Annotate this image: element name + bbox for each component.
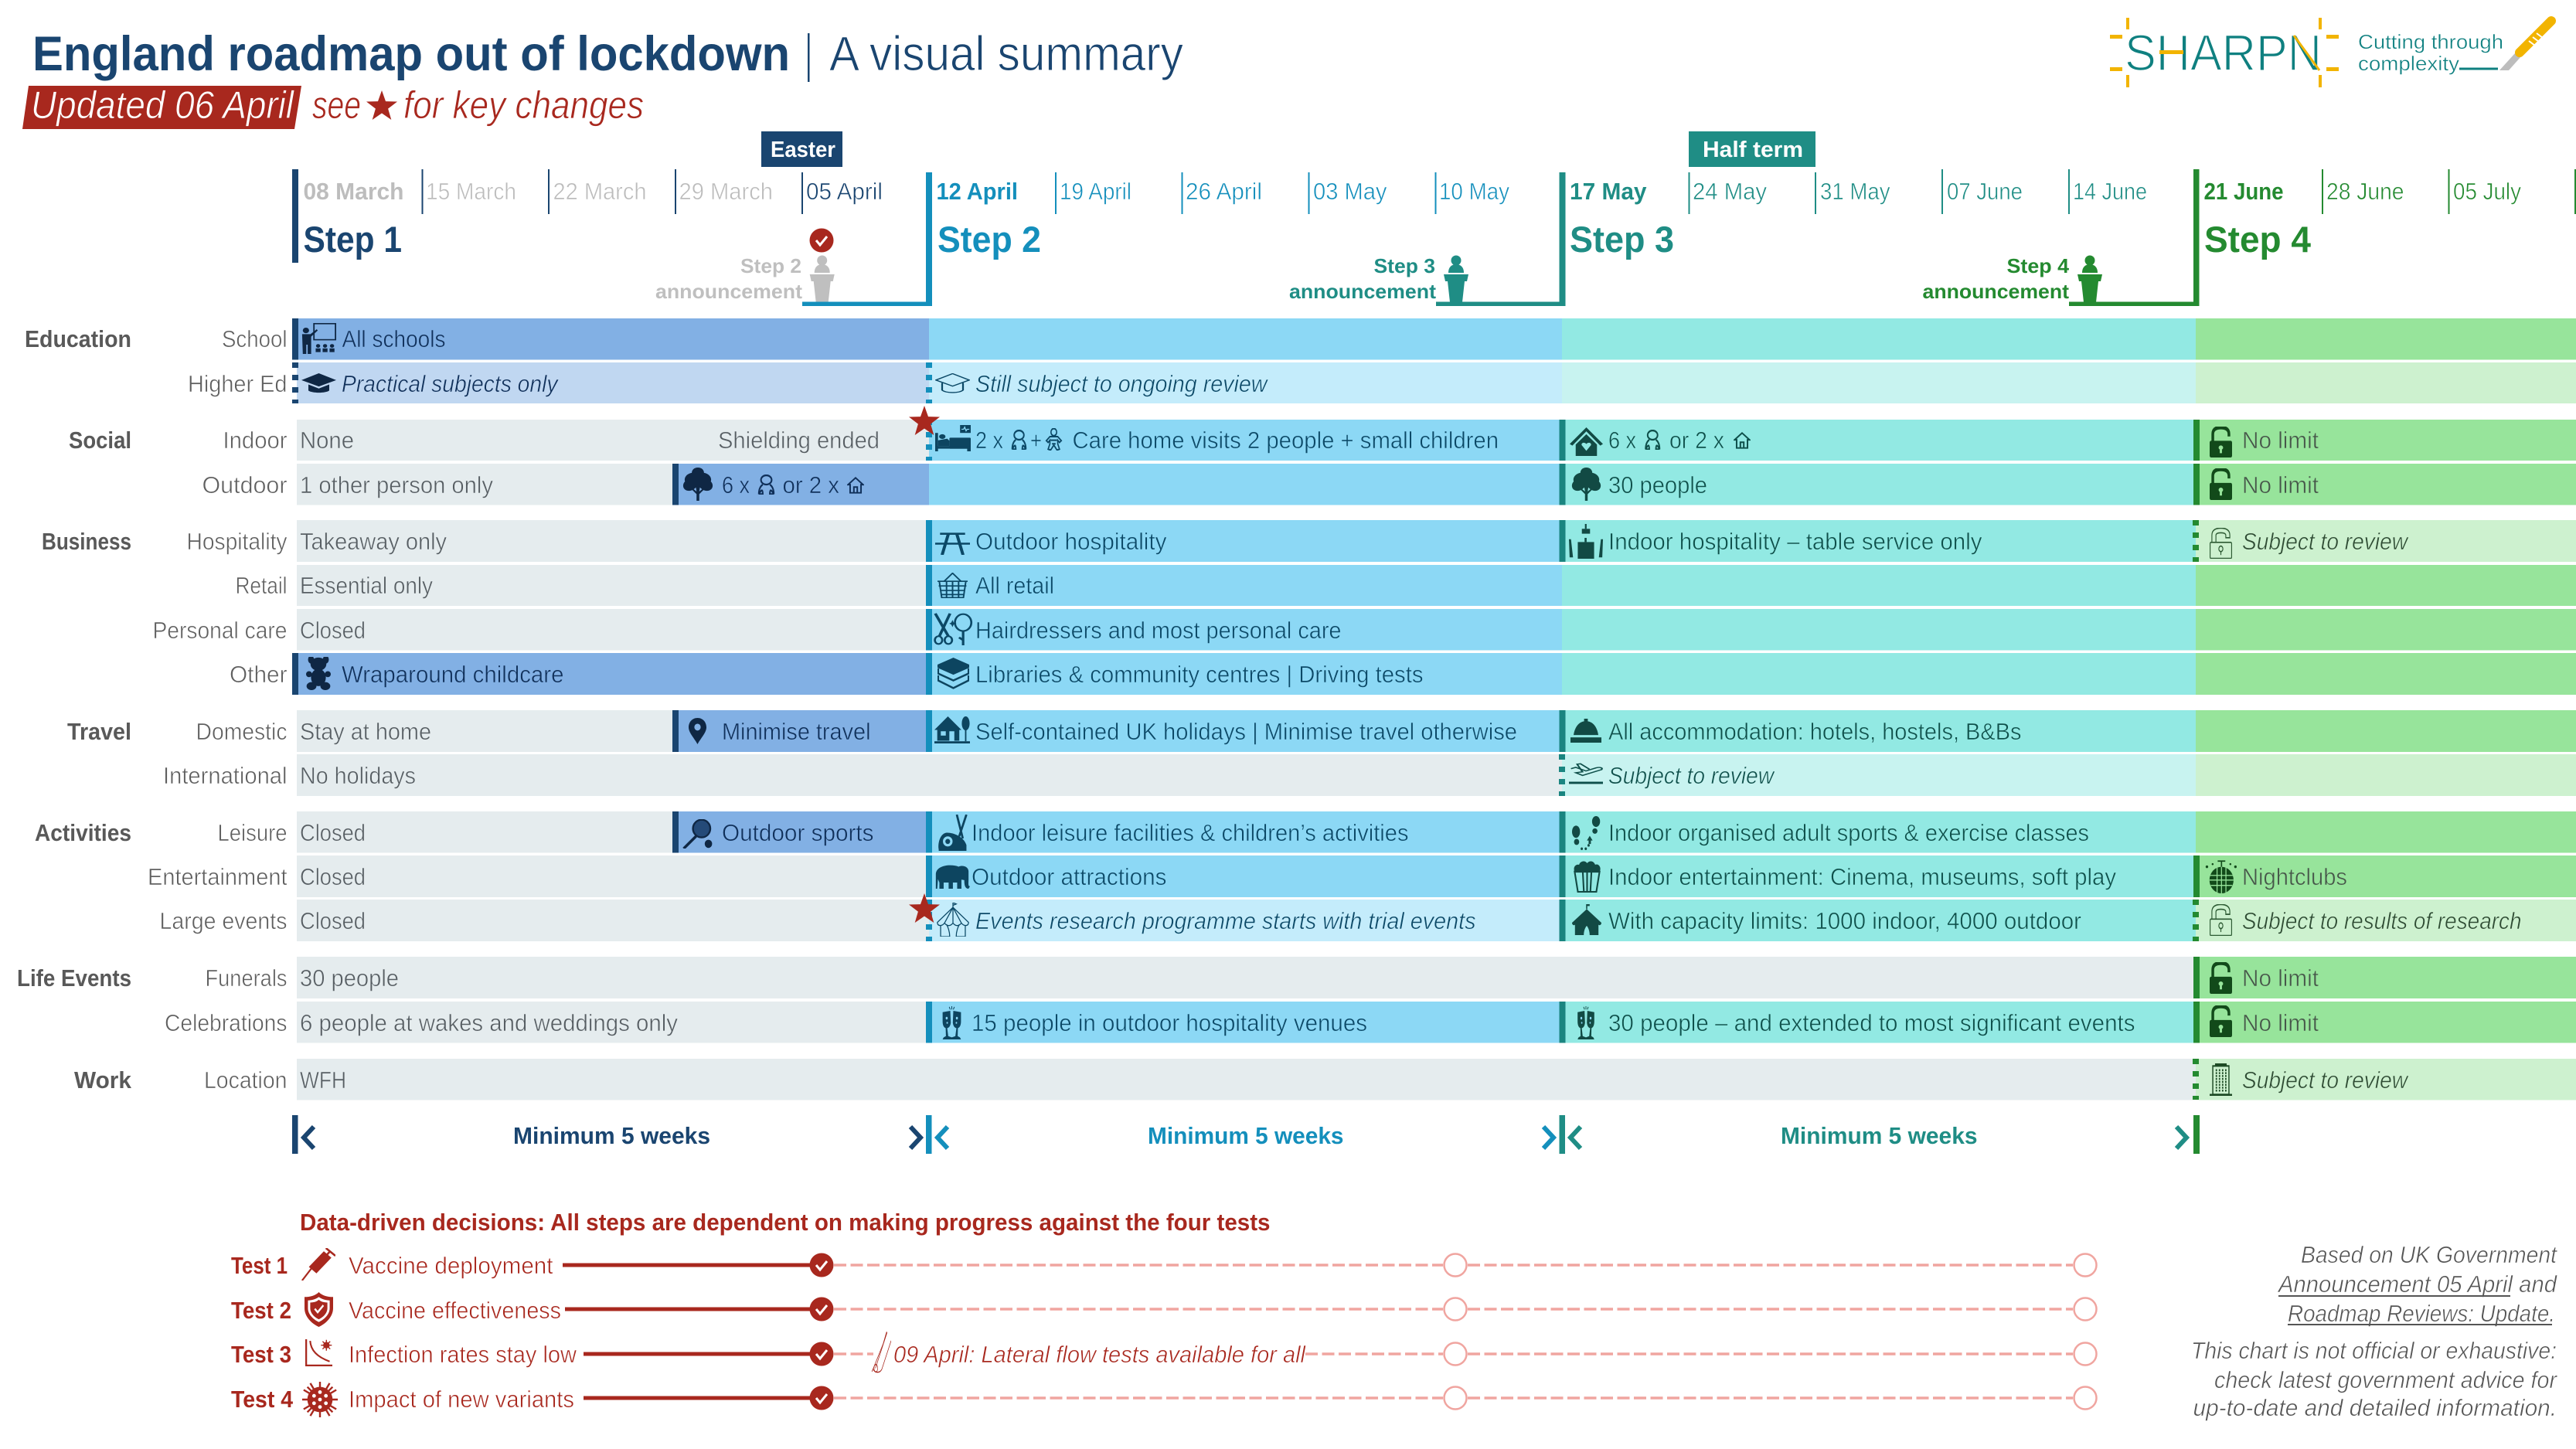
row: Business / Retail (297, 565, 2576, 606)
row labels: International (163, 762, 288, 789)
step 3 announcement (1289, 254, 1468, 303)
text: or 2 x: or 2 x (782, 471, 839, 498)
text: Subject to review: Subject to review (2242, 1066, 2409, 1094)
timeline: step 2: 26 April (1186, 178, 1262, 205)
timeline: step 1: 15 March (426, 178, 516, 205)
test 1: vaccine deployment: Vaccine deployment (349, 1252, 553, 1279)
icon: champagne flutes (1577, 1006, 1594, 1039)
text: Practical subjects only: Practical subjects only (342, 370, 560, 397)
text: Self-contained UK holidays: Self-contained UK holidays | Minimise travel otherwise (975, 718, 1517, 745)
row labels: Other (230, 661, 288, 688)
logo: SHARPN: SHARPN (2125, 24, 2322, 81)
timeline: step 4 (2069, 169, 2576, 306)
row labels: Leisure (218, 819, 288, 846)
category labels (17, 325, 132, 1094)
step 4 announcement (1923, 254, 2102, 303)
test 3: infection rates: Infection rates stay low (349, 1341, 577, 1368)
icon: tree (683, 468, 713, 501)
row labels: Entertainment (148, 863, 288, 890)
source note: Based on UK Government (2301, 1241, 2557, 1268)
text: Outdoor hospitality: Outdoor hospitality (975, 528, 1167, 555)
text: 15 people: 15 people in outdoor hospitality venues (972, 1009, 1367, 1036)
heading: data-driven decisions: Data-driven decisions: All steps are dependent on making progress against the four tests (300, 1209, 1271, 1236)
text: None: None (300, 427, 354, 454)
text: Stay at home: Stay at home (300, 718, 431, 745)
icon: virus (301, 1382, 339, 1417)
test 1: vaccine deployment: Test 1 (231, 1252, 288, 1279)
text: Closed: Closed (300, 819, 366, 846)
timeline: step 1: 29 March (679, 178, 773, 205)
category labels: Life Events (17, 964, 131, 992)
timeline: step 2: 12 April (937, 178, 1018, 205)
text: With capacity limits: With capacity limits: 1000 indoor, 4000 outdoor (1608, 907, 2081, 934)
logo: SHARPN (2110, 18, 2551, 87)
test 4: new variants: Impact of new variants (349, 1386, 574, 1413)
category labels: Travel (67, 718, 131, 745)
text: Closed: Closed (300, 863, 366, 890)
row labels: Higher Ed (188, 370, 288, 397)
logo: SHARPN: complexity (2358, 52, 2459, 75)
row labels: Domestic (196, 718, 288, 745)
text: All schools: All schools (342, 325, 445, 352)
text: Still subject to ongoing review: Still subject to ongoing review (975, 370, 1269, 397)
update banner: Updated 06 April (31, 83, 295, 127)
icon: holiday cottage (934, 716, 970, 743)
star: Shielding change (909, 406, 940, 435)
text: Wraparound childcare: Wraparound childcare (342, 661, 564, 688)
test 3: infection rates: Test 3 (231, 1341, 291, 1368)
text: Minimise travel: Minimise travel (722, 718, 870, 745)
row labels: Celebrations (165, 1009, 288, 1036)
arrow: step 3 minimum duration (1560, 1115, 2186, 1154)
row: Activities / Leisure (297, 811, 2576, 853)
timeline: step 4: 21 June (2204, 178, 2283, 205)
row: Business / Other (292, 653, 2576, 695)
icon: person (1012, 430, 1026, 449)
text: No limit: No limit (2242, 427, 2319, 454)
row labels: Location (204, 1066, 288, 1094)
text: plus: + (1030, 427, 1042, 454)
row labels: Retail (235, 572, 288, 599)
icon: open lock (2210, 469, 2232, 500)
icon: baby (1045, 428, 1062, 451)
timeline: step 1: Step 1 (303, 219, 402, 260)
text: Indoor entertainment: Indoor entertainment: Cinema, museums, soft play (1608, 863, 2116, 890)
timeline: step 3: 07 June (1947, 178, 2023, 205)
arrow: step 1 minimum duration (292, 1115, 920, 1154)
row: Life Events / Celebrations (297, 1002, 2576, 1043)
arrow: step 2 minimum duration (926, 1115, 1553, 1154)
row labels: Hospitality (187, 528, 288, 555)
text: Subject to review: Subject to review (1608, 762, 1775, 789)
icon: elephant (935, 866, 970, 889)
text: Indoor organised adult sports: Indoor organised adult sports & exercise classes (1608, 819, 2089, 846)
icon: syringe (301, 1248, 335, 1281)
title (32, 27, 1183, 82)
row: Business / Hospitality (297, 520, 2576, 562)
timeline: step 2: 10 May (1439, 178, 1509, 205)
test 1: vaccine deployment (231, 1248, 2096, 1281)
step 3 announcement: announcement (1289, 280, 1436, 303)
row: Life Events / Funerals (297, 957, 2576, 998)
row labels: Personal care (153, 617, 288, 644)
timeline: step 3: 14 June (2073, 178, 2147, 205)
key changes note: see (312, 83, 361, 127)
icon: cross trainer (938, 815, 968, 851)
text: No limit: No limit (2242, 964, 2319, 992)
text: 1 other person only: 1 other person only (300, 471, 493, 498)
text: Essential only: Essential only (300, 572, 433, 599)
icon: hotel bell (1570, 719, 1601, 743)
text: 6 people at wakes: 6 people at wakes and weddings only (300, 1009, 678, 1036)
icon: books (938, 658, 969, 689)
timeline: step 1 (292, 169, 883, 263)
disclaimer note (2191, 1337, 2558, 1421)
row labels: Funerals (206, 964, 288, 992)
text: No limit: No limit (2242, 471, 2319, 498)
step 2 announcement (done): announcement (655, 280, 802, 303)
category labels: Education (25, 325, 131, 352)
icon: person (759, 475, 774, 494)
icon: circus tent (1572, 904, 1601, 935)
timeline: step 3: Step 3 (1570, 219, 1674, 260)
text: or 2 x: or 2 x (1669, 427, 1724, 454)
icon: test tube (872, 1332, 891, 1372)
icon: graduation cap (301, 373, 336, 393)
disclaimer note: check latest government advice for (2214, 1366, 2558, 1393)
text: Closed: Closed (300, 617, 366, 644)
arrow end: step 4 tick (2193, 1115, 2200, 1154)
step 2 announcement (done): Step 2 (740, 254, 801, 277)
timeline: step 2: Step 2 (938, 219, 1041, 260)
step 4 announcement: announcement (1923, 280, 2069, 303)
timeline: step 4: 05 July (2453, 178, 2521, 205)
timeline: step 1: 05 April (806, 178, 883, 205)
timeline: step 3: 17 May (1570, 178, 1647, 205)
row: Travel / Domestic (297, 710, 2576, 752)
text: Closed: Closed (300, 907, 366, 934)
arrow: step 3 minimum duration: Minimum 5 weeks (1781, 1122, 1977, 1149)
row: Social / Indoor (297, 420, 2576, 461)
timeline: step 3: 31 May (1820, 178, 1890, 205)
icon: plane (1569, 764, 1603, 784)
text: Nightclubs: Nightclubs (2242, 863, 2347, 890)
text: WFH: WFH (300, 1066, 346, 1094)
category labels: Activities (35, 819, 131, 846)
icon: care home bed (935, 425, 971, 451)
text: 30 people and extended: 30 people – and extended to most significant events (1608, 1009, 2135, 1036)
icon: indoor table with lamp (1569, 524, 1603, 559)
icon: champagne flutes (943, 1006, 961, 1039)
text: Takeaway only: Takeaway only (300, 528, 447, 555)
key changes note: for key changes (403, 83, 644, 127)
source note (2277, 1241, 2558, 1327)
icon: basket (938, 573, 968, 598)
timeline: step 4: 28 June (2326, 178, 2404, 205)
text: All retail: All retail (975, 572, 1054, 599)
timeline: step 2 (802, 172, 1509, 306)
text: No holidays: No holidays (300, 762, 416, 789)
icon: footsteps (1572, 816, 1600, 850)
row: Social / Outdoor (297, 464, 2576, 505)
timeline: step 1: 22 March (553, 178, 646, 205)
arrow: step 1 minimum duration: Minimum 5 weeks (513, 1122, 710, 1149)
timeline: step 3 (1436, 169, 2147, 306)
text: Indoor leisure facilities: Indoor leisure facilities & children’s activities (972, 819, 1408, 846)
icon: teddy bear (306, 657, 331, 690)
icon: person (1645, 430, 1659, 449)
arrow: step 2 minimum duration: Minimum 5 weeks (1148, 1122, 1343, 1149)
title: England roadmap out of lockdown (32, 27, 790, 81)
step 4 announcement: Step 4 (2006, 254, 2070, 277)
text: All accommodation: All accommodation: hotels, hostels, B&Bs (1608, 718, 2022, 745)
icon: household (848, 478, 863, 493)
icon: shield (305, 1292, 333, 1327)
holiday tag: Half term: Half term (1703, 138, 1803, 162)
icon: open lock outline (2210, 904, 2231, 936)
icon: disco ball (2206, 860, 2237, 893)
test 3: infection rates: 09 April: Lateral flow tests available for all (893, 1341, 1306, 1368)
icon: circus tent outline (937, 903, 969, 937)
text: Hairdressers: Hairdressers and most personal care (975, 617, 1342, 644)
key changes note (312, 83, 644, 127)
icon: open lock (2210, 963, 2232, 994)
text: Subject to results of research: Subject to results of research (2242, 907, 2521, 934)
row labels: School (222, 325, 288, 352)
category labels: Social (69, 427, 131, 454)
icon: picnic table (935, 532, 970, 555)
category labels: Business (42, 528, 131, 555)
timeline: step 2: 19 April (1060, 178, 1131, 205)
star: Events change (909, 893, 940, 923)
row: Work / Location (297, 1059, 2576, 1100)
row: Education / School (292, 318, 2576, 360)
test 3: infection rates (231, 1332, 2096, 1372)
icon: open lock (2210, 1006, 2232, 1037)
icon: open lock outline (2210, 528, 2231, 559)
icon: house with heart (1570, 427, 1603, 456)
test 2: vaccine effectiveness (231, 1292, 2096, 1327)
text: Subject to review: Subject to review (2242, 528, 2409, 555)
icon: popcorn (1574, 861, 1601, 893)
text: 2 x: 2 x (975, 427, 1003, 454)
row: Travel / International (297, 754, 2576, 796)
row labels: Indoor (223, 427, 288, 454)
text: 6 x: 6 x (722, 471, 750, 498)
icon: graduation cap outline (935, 373, 970, 393)
text: Shielding ended: Shielding ended (718, 427, 880, 454)
holiday tag: Easter (761, 131, 842, 167)
icon: tennis racket (682, 819, 713, 849)
source note: Announcement 05 April and (2277, 1270, 2558, 1298)
timeline: step 4: Step 4 (2204, 219, 2311, 260)
holiday tag: Easter: Easter (771, 138, 835, 162)
test 2: vaccine effectiveness: Vaccine effectiveness (349, 1297, 561, 1324)
icon: household (1734, 433, 1750, 448)
icon: falling curve chart (305, 1339, 332, 1366)
icon: map pin (689, 718, 706, 744)
text: 30 people: 30 people (300, 964, 399, 992)
text: Outdoor sports: Outdoor sports (722, 819, 873, 846)
holiday tag: Half term (1689, 131, 1815, 167)
timeline: step 1: 08 March (303, 178, 403, 205)
row: Education / Higher Ed (295, 362, 2576, 403)
text: Care home visits: Care home visits 2 people + small children (1073, 427, 1499, 454)
icon: teacher at board (301, 323, 336, 354)
disclaimer note: up-to-date and detailed information. (2193, 1394, 2557, 1421)
icon: scissors and mirror (934, 613, 972, 645)
text: Outdoor attractions: Outdoor attractions (972, 863, 1167, 890)
icon: tree (1572, 468, 1601, 501)
row: Activities / Large events (297, 900, 2576, 941)
row: Activities / Entertainment (297, 855, 2576, 897)
logo: SHARPN: Cutting through (2358, 30, 2503, 53)
text: 30 people: 30 people (1608, 471, 1707, 498)
row labels: Large events (159, 907, 288, 934)
text: No limit: No limit (2242, 1009, 2319, 1036)
text: 6 x: 6 x (1608, 427, 1636, 454)
title: A visual summary (829, 27, 1183, 81)
icon: open lock (2210, 427, 2232, 457)
step 2 announcement (done) (655, 229, 835, 303)
test 2: vaccine effectiveness: Test 2 (231, 1297, 291, 1324)
row: Business / Personal care (297, 609, 2576, 651)
text: Libraries: Libraries & community centres | Driving tests (975, 661, 1424, 688)
step 3 announcement: Step 3 (1374, 254, 1435, 277)
text: Events research programme: Events research programme starts with trial events (975, 907, 1476, 934)
row labels: Outdoor (202, 471, 288, 498)
timeline: step 3: 24 May (1693, 178, 1767, 205)
test 4: new variants: Test 4 (231, 1386, 294, 1413)
text: Indoor hospitality: Indoor hospitality – table service only (1608, 528, 1982, 555)
category labels: Work (74, 1066, 132, 1094)
icon: office building (2210, 1063, 2232, 1096)
timeline: step 2: 03 May (1313, 178, 1387, 205)
test 4: new variants (231, 1382, 2096, 1417)
row labels (148, 325, 288, 1094)
